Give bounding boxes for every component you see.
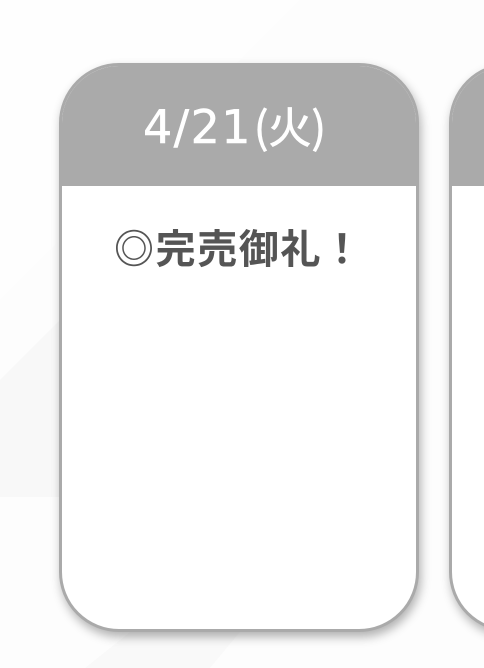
panel: date card 4/21	[59, 63, 419, 632]
card header band	[59, 63, 419, 186]
text: sold out message: ◎完売御礼！	[114, 228, 364, 272]
panel: next date card (cropped)	[449, 63, 484, 632]
heading: date: 4/21(火)	[143, 94, 326, 156]
next card header band	[449, 63, 484, 186]
